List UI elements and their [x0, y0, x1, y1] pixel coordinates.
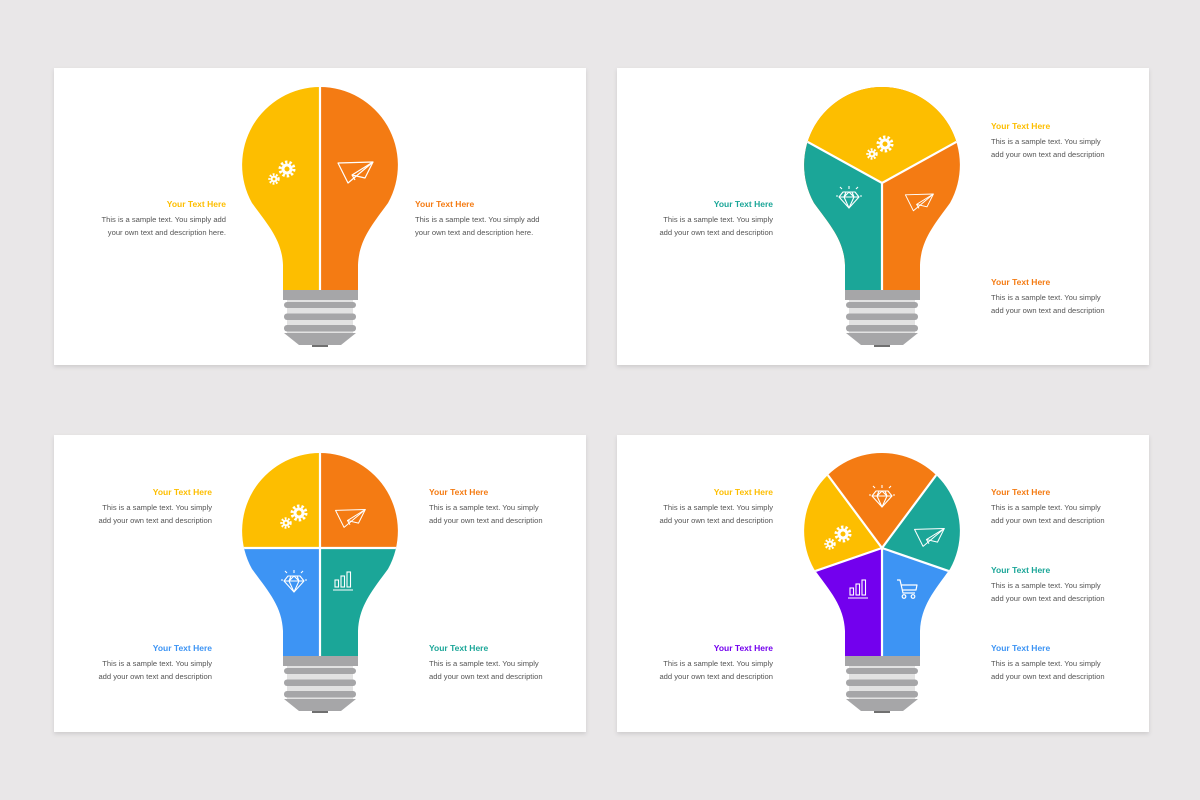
- text block: blue: Your Text Here: [153, 643, 212, 653]
- text block: orange: [429, 487, 543, 525]
- text block: blue: This is a sample text. You simply: [991, 659, 1101, 668]
- icon: diamond: [869, 485, 895, 507]
- text block: teal: Your Text Here: [429, 643, 488, 653]
- text block: orange: [991, 487, 1105, 525]
- text block: orange: add your own text and description: [991, 516, 1105, 525]
- text block: teal: add your own text and description: [659, 228, 773, 237]
- text block: yellow: This is a sample text. You simply: [991, 137, 1101, 146]
- bulb 3: [242, 453, 398, 713]
- icon: cart: [897, 580, 917, 598]
- icon: paper plane: [338, 162, 373, 183]
- text block: yellow: [659, 487, 773, 525]
- text block: blue: Your Text Here: [991, 643, 1050, 653]
- text block: purple: Your Text Here: [714, 643, 773, 653]
- bulb 2: [804, 87, 960, 347]
- text block: yellow: add your own text and description: [98, 516, 212, 525]
- icon: bar chart: [848, 580, 868, 598]
- text block: blue: add your own text and description: [991, 672, 1105, 681]
- text block: teal: [429, 643, 543, 681]
- bulb 1: [242, 87, 398, 347]
- text block: yellow: add your own text and description: [659, 516, 773, 525]
- text block: teal: add your own text and description: [991, 594, 1105, 603]
- panel: card 4 five-part bulb: [617, 400, 1149, 732]
- text block: teal: [991, 565, 1105, 603]
- text block: yellow: This is a sample text. You simply: [663, 503, 773, 512]
- text block: orange: Your Text Here: [429, 487, 488, 497]
- panel: card 2 three-part bulb: [617, 65, 1149, 365]
- text block: yellow: This is a sample text. You simply: [102, 503, 212, 512]
- icon: paper plane: [905, 194, 933, 211]
- text block: orange: add your own text and description: [991, 306, 1105, 315]
- panel: card 1 two-part bulb: [54, 68, 586, 365]
- text block: yellow: [991, 121, 1105, 159]
- text block: blue: add your own text and description: [98, 672, 212, 681]
- icon: gears: [270, 162, 294, 184]
- text block: orange: Your Text Here: [991, 277, 1050, 287]
- text block: blue: This is a sample text. You simply: [102, 659, 212, 668]
- text block: orange: This is a sample text. You simply: [991, 293, 1101, 302]
- text block: yellow: [98, 487, 212, 525]
- bulb 4: [804, 453, 960, 713]
- text block: left: Your Text Here: [167, 199, 226, 209]
- text block: right: Your Text Here: [415, 199, 474, 209]
- text block: blue: [991, 643, 1105, 681]
- text block: purple: add your own text and description: [659, 672, 773, 681]
- text block: yellow: Your Text Here: [714, 487, 773, 497]
- text block: orange: This is a sample text. You simply: [429, 503, 539, 512]
- icon: gears: [826, 527, 850, 548]
- text block: right: your own text and description here.: [415, 228, 533, 237]
- text block: yellow: Your Text Here: [991, 121, 1050, 131]
- icon: paper plane: [336, 510, 365, 527]
- text block: teal: Your Text Here: [714, 199, 773, 209]
- text block: blue: [98, 643, 212, 681]
- text block: teal: This is a sample text. You simply: [429, 659, 539, 668]
- text block: orange: [991, 277, 1105, 315]
- icon: paper plane: [915, 528, 944, 546]
- icon: gears: [868, 137, 892, 158]
- text block: purple: This is a sample text. You simply: [663, 659, 773, 668]
- text block: teal: This is a sample text. You simply: [991, 581, 1101, 590]
- text block: orange: Your Text Here: [991, 487, 1050, 497]
- text block: left: [101, 199, 226, 237]
- text block: teal: add your own text and description: [429, 672, 543, 681]
- text block: left: your own text and description here.: [108, 228, 226, 237]
- text block: right: [415, 199, 540, 237]
- text block: orange: add your own text and description: [429, 516, 543, 525]
- panel: card 3 four-part bulb: [54, 435, 586, 732]
- icon: diamond: [281, 570, 307, 592]
- text block: purple: [659, 643, 773, 681]
- icon: diamond: [836, 186, 862, 208]
- text block: left: This is a sample text. You simply add: [101, 215, 226, 224]
- text block: teal: Your Text Here: [991, 565, 1050, 575]
- icon: bar chart: [333, 572, 353, 590]
- text block: yellow: add your own text and description: [991, 150, 1105, 159]
- text block: teal: [659, 199, 773, 237]
- text block: teal: This is a sample text. You simply: [663, 215, 773, 224]
- icon: gears: [282, 506, 306, 528]
- text block: yellow: Your Text Here: [153, 487, 212, 497]
- text block: right: This is a sample text. You simply add: [415, 215, 540, 224]
- text block: orange: This is a sample text. You simply: [991, 503, 1101, 512]
